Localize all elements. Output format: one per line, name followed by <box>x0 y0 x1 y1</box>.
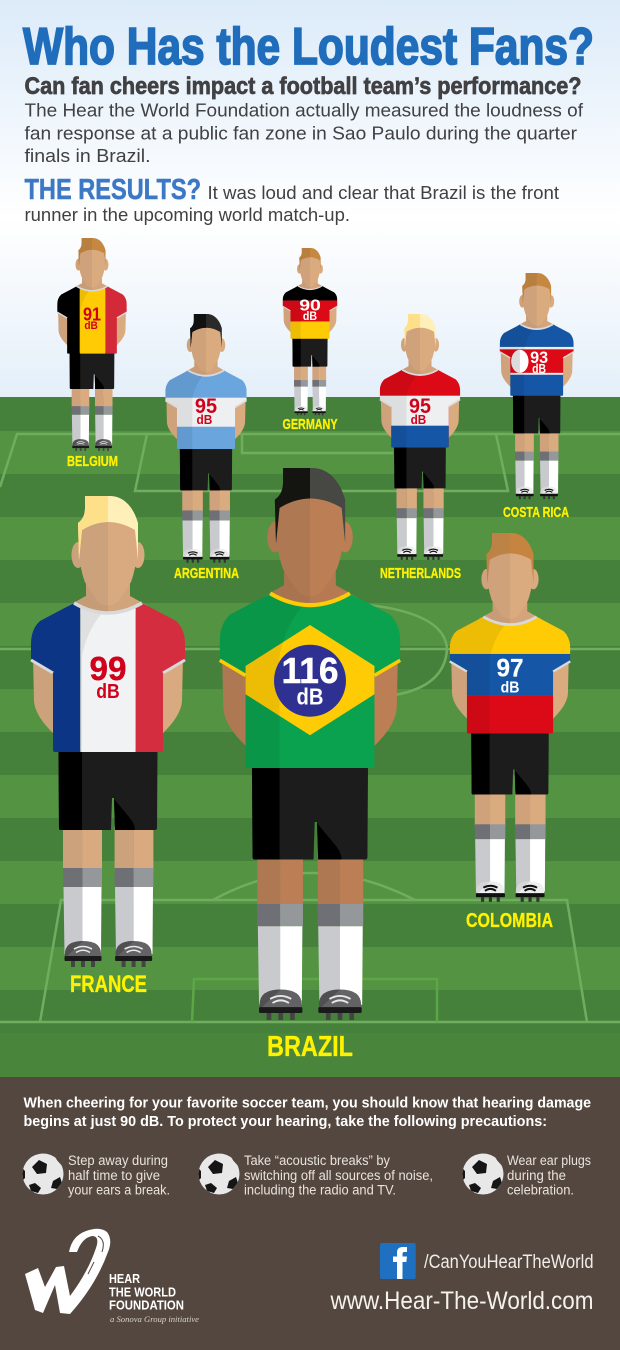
tip 2 <box>195 1150 433 1198</box>
player: Netherlands: dB <box>411 413 426 427</box>
tip 2: Take “acoustic breaks” by <box>244 1153 390 1168</box>
tip 3: Wear ear plugs <box>507 1153 591 1168</box>
tip 2: including the radio and TV. <box>244 1182 396 1198</box>
facebook handle: /CanYouHearTheWorld <box>424 1252 594 1273</box>
icon: facebook <box>380 1243 416 1279</box>
player: Colombia <box>447 533 573 932</box>
player: Argentina: ARGENTINA <box>174 565 239 582</box>
player: Germany: GERMANY <box>282 417 338 433</box>
player: Germany: dB <box>303 310 317 323</box>
player: France: 99 <box>90 650 126 687</box>
logo: Hear the World Foundation: HEAR <box>109 1272 140 1286</box>
player: France: FRANCE <box>70 971 147 998</box>
warning text: When cheering for your favorite soccer team, you should know that hearing damage <box>24 1095 591 1112</box>
emblem: white oval <box>511 350 529 373</box>
player: Colombia: dB <box>501 679 519 696</box>
logo: Hear the World Foundation: a Sonova Group initiative <box>110 1314 199 1324</box>
intro paragraph <box>24 100 584 166</box>
warning text <box>24 1095 591 1130</box>
tip 3: celebration. <box>507 1182 574 1198</box>
player: Costa Rica: dB <box>532 361 546 376</box>
badge: blue circle <box>274 645 346 717</box>
player: Belgium: 91 <box>83 304 101 325</box>
player: Brazil: BRAZIL <box>267 1031 353 1063</box>
player: Colombia: 97 <box>496 654 524 682</box>
tip 3: during the <box>507 1168 566 1183</box>
player: Germany: 90 <box>299 298 321 315</box>
tip 3 <box>459 1150 591 1198</box>
website: www.Hear-The-World.com <box>330 1287 594 1315</box>
tip 1: Step away during <box>68 1153 168 1168</box>
logo: Hear the World Foundation: FOUNDATION <box>109 1298 184 1312</box>
logo mark: brush W <box>25 1229 110 1314</box>
results text: It was loud and clear that Brazil is the front <box>208 182 559 203</box>
logo: Hear the World Foundation: THE WORLD <box>109 1286 176 1300</box>
player: Brazil <box>216 468 404 1063</box>
tip 1 <box>19 1150 170 1198</box>
player: France <box>28 496 189 998</box>
player: Brazil: 116 <box>282 650 338 691</box>
player: Netherlands <box>378 314 462 582</box>
player: Germany <box>282 248 338 433</box>
player: Belgium <box>56 238 129 470</box>
results text <box>24 174 559 225</box>
player: Colombia: COLOMBIA <box>466 910 553 932</box>
intro paragraph: The Hear the World Foundation actually measured the loudness of <box>24 100 584 121</box>
footer panel <box>0 1077 620 1350</box>
logo: Hear the World Foundation <box>25 1229 199 1324</box>
player: Netherlands: 95 <box>409 394 431 418</box>
results text: THE RESULTS? <box>24 174 201 206</box>
player: Belgium: BELGIUM <box>67 453 118 470</box>
player: Argentina: dB <box>196 413 212 427</box>
tip 2: switching off all sources of noise, <box>244 1168 433 1183</box>
player: Belgium: dB <box>84 320 98 332</box>
intro paragraph: finals in Brazil. <box>24 145 150 166</box>
player: Costa Rica: 93 <box>530 349 548 367</box>
player: Costa Rica: COSTA RICA <box>503 504 569 521</box>
results text: runner in the upcoming world match-up. <box>24 204 350 225</box>
intro paragraph: fan response at a public fan zone in Sao Paulo during the quarter <box>24 122 577 143</box>
player: Argentina: 95 <box>195 393 217 418</box>
player: France: dB <box>96 681 120 703</box>
tip 1: your ears a break. <box>68 1182 170 1198</box>
tip 1: half time to give <box>68 1168 160 1183</box>
player: Netherlands: NETHERLANDS <box>380 565 461 582</box>
warning text: begins at just 90 dB. To protect your hearing, take the following precautions: <box>24 1113 547 1130</box>
football pitch <box>0 397 620 1077</box>
player: Argentina <box>164 314 248 582</box>
player: Brazil: dB <box>297 684 323 710</box>
sky background <box>0 0 620 397</box>
player: Costa Rica <box>498 273 575 521</box>
